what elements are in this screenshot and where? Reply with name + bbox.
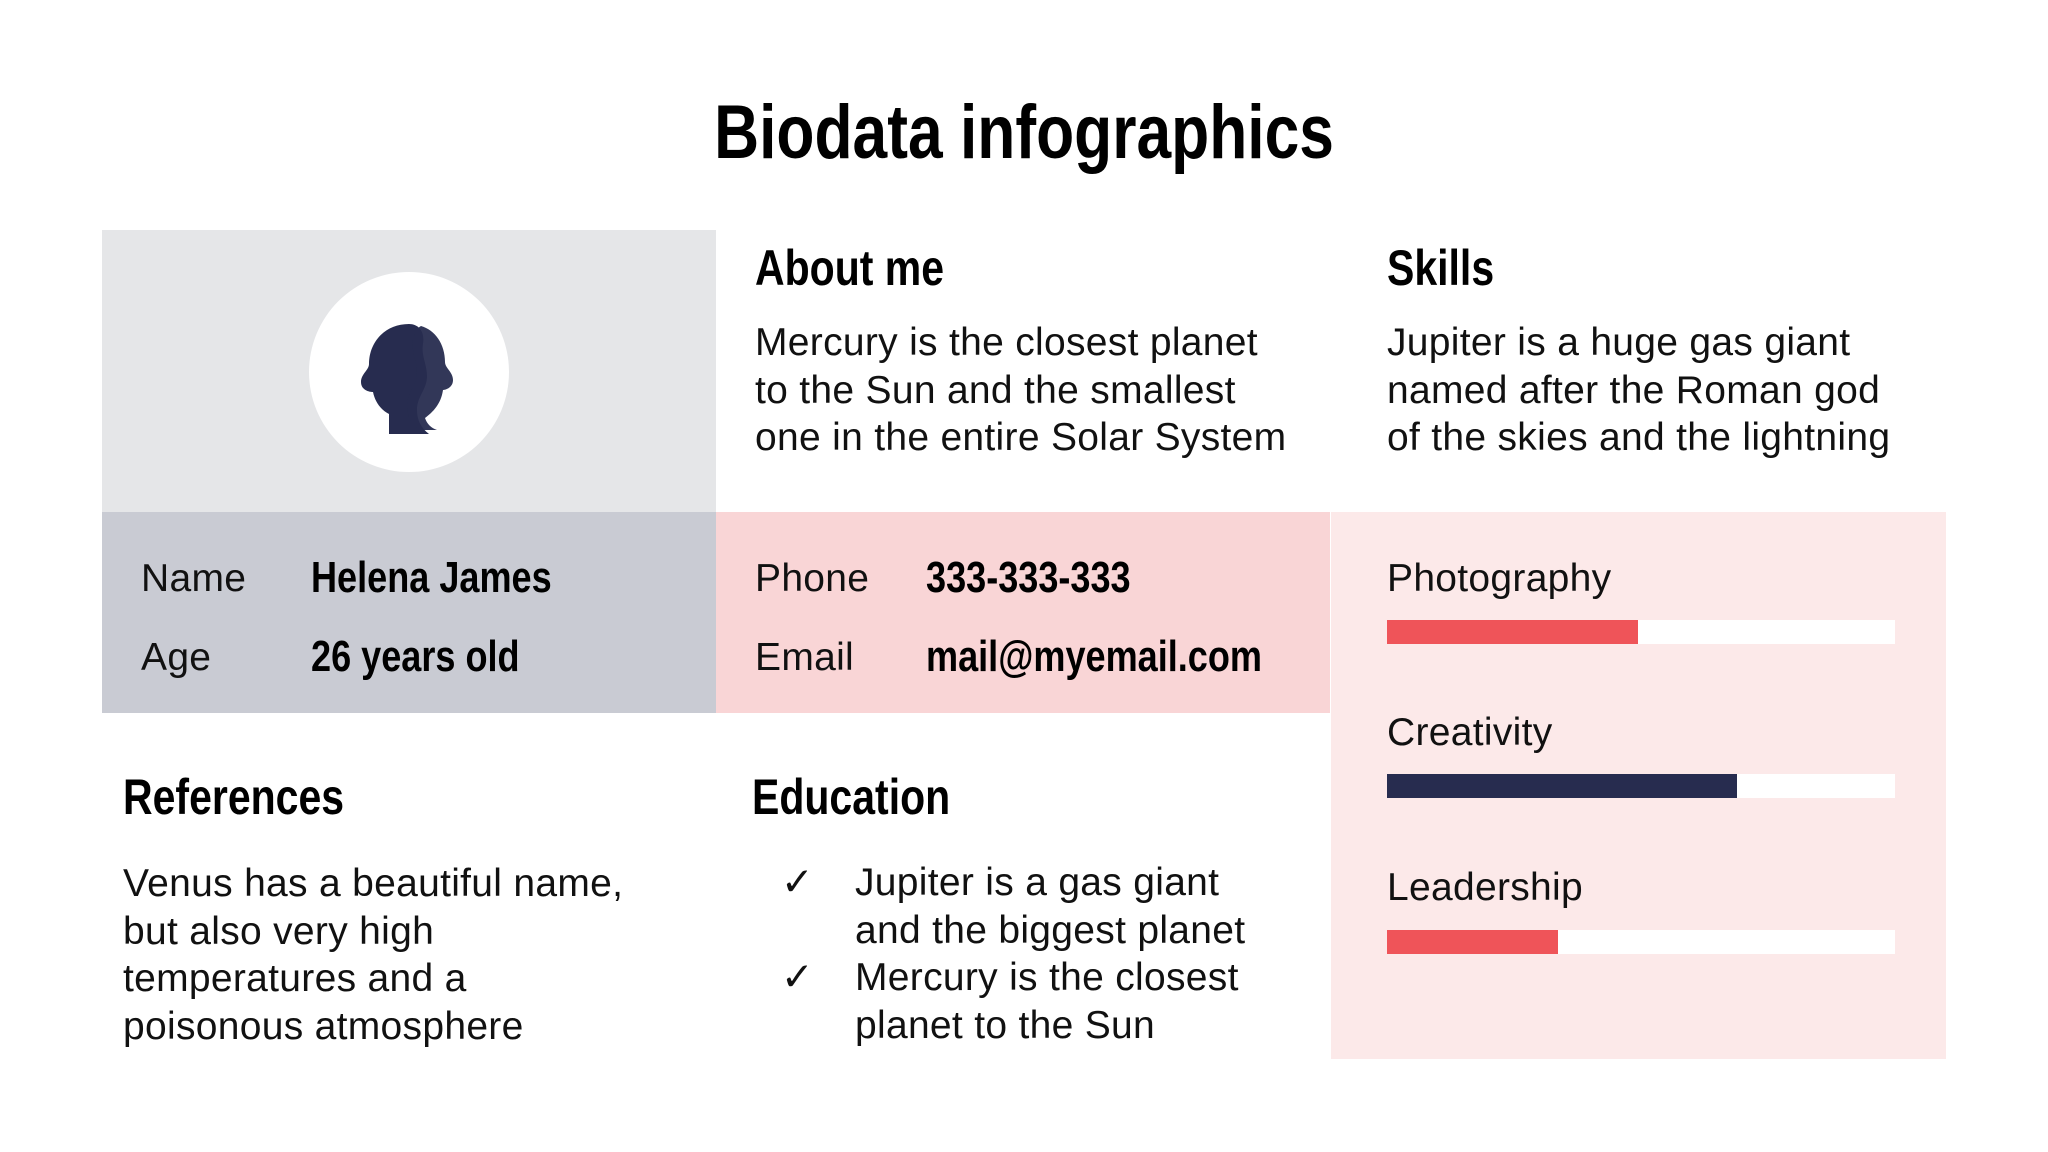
skills text: named after the Roman god	[1387, 368, 1880, 412]
references: poisonous atmosphere	[123, 1004, 524, 1048]
panel: skills bars	[1331, 512, 1946, 1059]
title: Biodata infographics	[714, 90, 1334, 175]
about me	[755, 240, 1286, 459]
panel: contact	[716, 512, 1330, 713]
text: Mercury is the closest	[855, 956, 1239, 999]
text: planet to the Sun	[855, 1004, 1155, 1046]
skills text	[1387, 240, 1890, 459]
panel: contact: 333-333-333	[926, 553, 1131, 602]
education: Education	[752, 769, 950, 825]
panel: name/age: Helena James	[311, 553, 552, 602]
references: temperatures and a	[123, 957, 467, 1000]
text: ✓	[781, 956, 814, 999]
text: ✓	[781, 861, 814, 904]
panel: contact: Phone	[755, 557, 869, 600]
panel: photo	[102, 230, 716, 512]
text: and the biggest planet	[855, 908, 1245, 952]
skills text: Skills	[1387, 240, 1494, 296]
skills text: Jupiter is a huge gas giant	[1387, 321, 1850, 364]
references: Venus has a beautiful name,	[123, 862, 623, 905]
references: References	[123, 769, 344, 825]
education	[752, 769, 1245, 1046]
about me: About me	[755, 240, 944, 296]
references	[123, 769, 623, 1048]
panel: name/age: Name	[141, 557, 246, 600]
panel: name/age: Age	[141, 636, 211, 679]
skill: leadership: Leadership	[1387, 866, 1583, 909]
panel: name/age	[102, 512, 716, 713]
panel: name/age: 26 years old	[311, 632, 520, 681]
skill: photography: Photography	[1387, 557, 1611, 600]
skill: creativity: Creativity	[1387, 711, 1553, 754]
text: Jupiter is a gas giant	[855, 861, 1219, 904]
about me: one in the entire Solar System	[755, 416, 1286, 459]
references: but also very high	[123, 910, 434, 952]
panel: contact: mail@myemail.com	[926, 632, 1262, 681]
about me: to the Sun and the smallest	[755, 368, 1236, 412]
icon: avatar circle	[309, 272, 509, 472]
skills text: of the skies and the lightning	[1387, 416, 1890, 459]
panel: contact: Email	[755, 636, 854, 679]
about me: Mercury is the closest planet	[755, 321, 1258, 364]
